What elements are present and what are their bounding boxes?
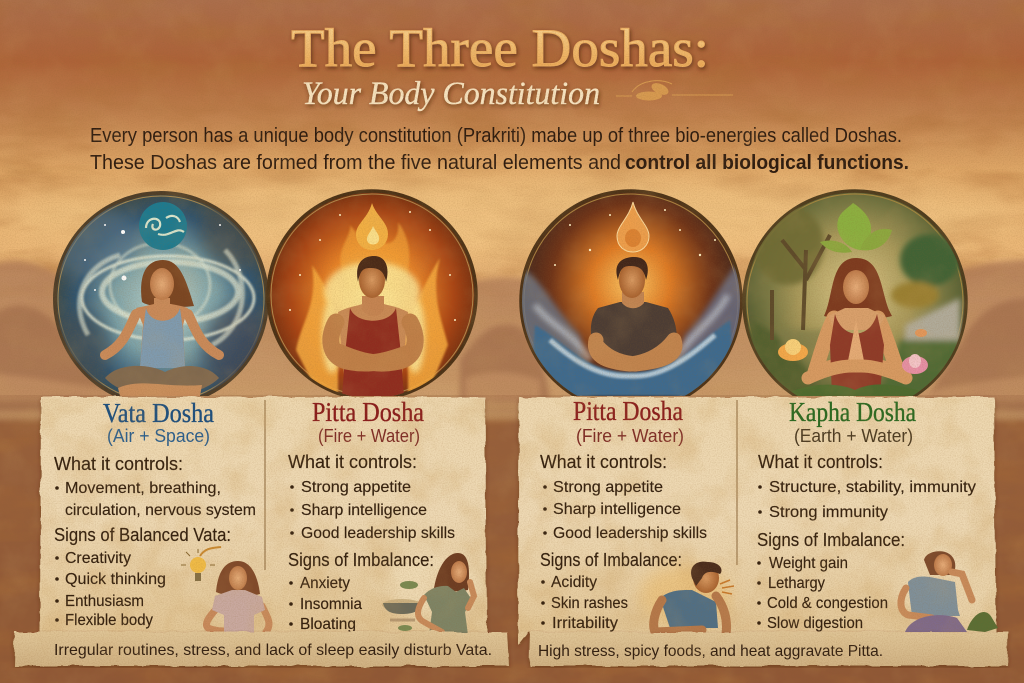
icon: flame [356,203,388,250]
panel: Vata and Pitta parchment [40,397,487,632]
intro text: Every person has a unique body constitution (Prakriti) mabe up of three bio-energies called Doshas. [90,125,902,147]
intro text [90,125,909,174]
panel text: Kapha Dosha: Slow digestion [767,615,863,632]
panel text: Pitta Dosha with anxiety signs: What it controls: [288,452,417,472]
panel text: Pitta Dosha with acidity signs: Good leadership skills [553,525,707,542]
panel text: Pitta Dosha with acidity signs: Skin rashes [551,595,628,612]
panel text: Kapha Dosha: Cold & congestion [767,595,888,612]
panel text: Pitta Dosha with anxiety signs [288,397,455,633]
panel text: Vata Dosha [54,398,256,629]
banner: Pitta caution: High stress, spicy foods, and heat aggravate Pitta. [538,643,883,660]
intro text: control all biological functions. [625,152,909,174]
panel text: Kapha Dosha: Weight gain [769,555,848,572]
icon: lotus flowers [778,329,928,374]
panel text: Vata Dosha: Movement, breathing, [65,480,221,497]
illustration: man with acidity [654,562,734,634]
intro text: These Doshas are formed from the five natural elements and [90,152,621,174]
title: The Three Doshas: [291,18,709,78]
banner: Vata caution: Irregular routines, stress, and lack of sleep easily disturb Vata. [54,642,492,659]
icon: leaves [820,203,892,253]
subtitle: Your Body Constitution [302,76,600,112]
panel text: Vata Dosha: Flexible body [65,612,153,629]
icon: water drop [617,202,649,252]
panel text: Pitta Dosha with anxiety signs: Anxiety [300,575,350,592]
panel text: Vata Dosha: Creativity [65,550,131,567]
panel text: Kapha Dosha: Kapha Dosha [789,397,916,427]
icon: wind element [139,202,187,250]
panel text: Vata Dosha: What it controls: [54,454,183,474]
medallion: Pitta fire and water [519,189,742,396]
panel text: Pitta Dosha with acidity signs: Sharp intelligence [553,501,681,518]
figure: man in dark t-shirt [591,257,677,365]
panel text: Vata Dosha: (Air + Space) [107,425,210,446]
panel text: Kapha Dosha: Signs of Imbalance: [757,530,905,550]
banner: Pitta caution [529,632,1009,666]
panel text: Pitta Dosha with acidity signs: What it controls: [540,452,667,472]
panel text: Pitta Dosha with anxiety signs: Sharp intelligence [301,502,427,519]
panel text: Vata Dosha: Quick thinking [65,571,166,588]
panel text: Pitta Dosha with acidity signs: Signs of Imbalance: [540,550,682,570]
figure: meditating woman [105,260,219,396]
panel text: Kapha Dosha [757,397,976,632]
illustration: tired woman [901,551,998,632]
medallion: Pitta fire [268,191,476,399]
figure: man with crossed arms [331,256,415,396]
panel text: Kapha Dosha: What it controls: [758,452,883,472]
medallion: Vata air and space [53,191,268,396]
panel text: Kapha Dosha: Structure, stability, immunity [769,479,976,496]
medallion: Kapha earth and water [744,191,966,413]
panel text: Vata Dosha: Signs of Balanced Vata: [54,525,231,545]
panel text: Kapha Dosha: (Earth + Water) [794,425,913,446]
panel text: Pitta Dosha with acidity signs: Irritability [552,615,618,632]
panel: Pitta and Kapha parchment [518,397,996,645]
ornament: herbal pods [616,81,733,100]
illustration: uneasy woman with bowl [382,553,474,635]
panel text: Pitta Dosha with anxiety signs: Insomnia [300,596,362,613]
banner: Vata caution [14,632,509,666]
illustration: happy woman with light bulb [181,547,269,635]
figure: woman with praying hands [808,258,906,396]
foliage at base [792,384,920,396]
panel text: Vata Dosha: Vata Dosha [103,398,214,428]
panel text: Pitta Dosha with acidity signs [540,396,707,632]
panel text: Kapha Dosha: Strong immunity [769,504,888,521]
panel text: Pitta Dosha with anxiety signs: (Fire + Water) [318,425,420,446]
panel text: Pitta Dosha with anxiety signs: Strong appetite [301,479,411,496]
parchment texture [30,390,1010,640]
panel text: Pitta Dosha with anxiety signs: Signs of Imbalance: [288,550,434,570]
panel text: Pitta Dosha with acidity signs: Strong appetite [553,479,663,496]
panel text: Vata Dosha: circulation, nervous system [65,502,256,519]
panel text: Pitta Dosha with anxiety signs: Pitta Dosha [312,397,424,427]
panel text: Pitta Dosha with acidity signs: Pitta Dosha [573,396,683,426]
panel text: Pitta Dosha with acidity signs: Acidity [551,574,597,591]
panel text: Vata Dosha: Enthusiasm [65,593,144,610]
panel text: Pitta Dosha with anxiety signs: Good leadership skills [301,525,455,542]
panel text: Pitta Dosha with anxiety signs: Bloating [300,616,356,633]
panel text: Kapha Dosha: Lethargy [768,575,825,592]
panel text: Pitta Dosha with acidity signs: (Fire + Water) [576,425,684,446]
